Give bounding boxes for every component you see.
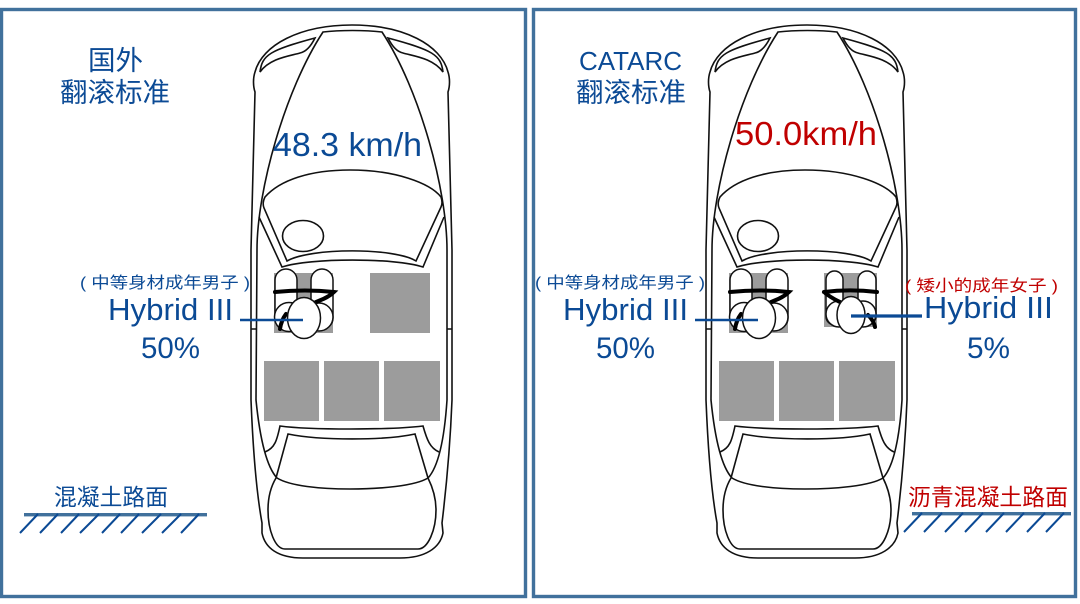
leader line <box>240 319 303 321</box>
dummy: Hybrid III 5% passenger <box>824 271 877 334</box>
leader line: female <box>851 314 922 318</box>
dummy label: Hybrid III <box>108 292 233 327</box>
title: overseas rollover standard: 国外 <box>88 46 143 76</box>
dummy label: ( 中等身材成年男子 ) <box>80 274 250 292</box>
title: overseas rollover standard: 翻滚标准 <box>60 78 170 108</box>
ground: concrete road: 混凝土路面 <box>54 484 168 510</box>
dummy label: female: Hybrid III <box>924 290 1053 325</box>
dummy: Hybrid III 50% driver <box>729 269 789 338</box>
front passenger seat <box>370 273 430 333</box>
leader line: male <box>695 319 758 321</box>
dummy label: male <box>535 274 705 365</box>
panel: international standard <box>2 10 526 596</box>
dummy label: male: Hybrid III <box>563 292 688 327</box>
dummy label: 50% <box>141 332 200 365</box>
title: CATARC rollover standard <box>576 46 686 108</box>
panel: CATARC standard <box>534 10 1076 596</box>
dummy: Hybrid III 50% driver <box>274 269 334 338</box>
ground: asphalt concrete road: 沥青混凝土路面 <box>908 484 1068 510</box>
ground: concrete road <box>20 484 207 533</box>
title: CATARC rollover standard: 翻滚标准 <box>576 78 686 108</box>
dummy label: female: 5% <box>967 332 1010 365</box>
dummy label: female: ( 矮小的成年女子 ) <box>905 276 1058 295</box>
rear seats <box>719 361 895 421</box>
dummy label: male: 50% <box>596 332 655 365</box>
title: CATARC rollover standard: CATARC <box>579 46 682 76</box>
car: right top view <box>706 25 907 558</box>
speed label: 48.3 km/h <box>273 126 422 163</box>
dummy label: female <box>905 276 1058 365</box>
car: left top view <box>251 25 452 558</box>
title: overseas rollover standard <box>60 46 170 108</box>
rear seats <box>264 361 440 421</box>
speed label: 50.0km/h <box>735 115 877 152</box>
dummy label <box>80 274 250 365</box>
ground: asphalt concrete road <box>904 484 1071 532</box>
dummy label: male: ( 中等身材成年男子 ) <box>535 274 705 292</box>
